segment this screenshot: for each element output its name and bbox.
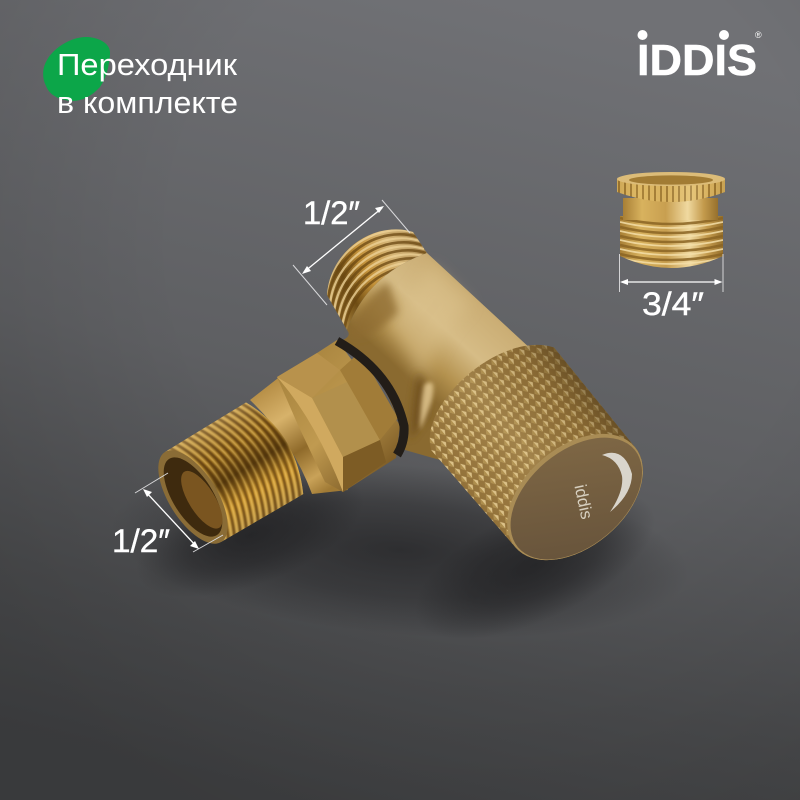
adapter thread	[620, 216, 723, 268]
adapter neck	[623, 198, 718, 220]
adapter collar	[617, 172, 725, 202]
hex nut and collar	[277, 340, 400, 492]
heading: в комплекте	[57, 85, 238, 120]
rubber sealing ring	[337, 341, 404, 455]
green accent blob	[43, 37, 110, 101]
brand logo: ®	[755, 30, 762, 40]
cap swoosh mark	[602, 453, 632, 512]
knob cap	[483, 409, 667, 585]
cast shadow	[104, 440, 696, 670]
knurled knob	[409, 321, 668, 587]
heading: Переходник	[57, 47, 237, 82]
body highlight and shading	[350, 265, 470, 440]
hex lower face	[343, 440, 386, 492]
valve body	[343, 253, 532, 460]
lower threaded pipe	[158, 402, 304, 544]
cap logo: iddis	[570, 483, 596, 521]
dimension: lower 1/2 inch: 1/2″	[112, 523, 170, 559]
dimension: upper 1/2 inch: 1/2″	[303, 195, 360, 231]
adapter fitting	[617, 172, 725, 268]
pipe neck	[250, 375, 348, 494]
brand logo: IDDIS	[637, 36, 757, 85]
dimension: lower 1/2 inch	[112, 473, 223, 559]
collar highlight	[340, 352, 398, 440]
heading	[57, 47, 238, 120]
dimension: upper 1/2 inch	[293, 195, 410, 305]
hex top face	[277, 353, 340, 398]
upper threaded stub	[326, 229, 434, 332]
hex center face	[312, 382, 380, 457]
pipe end rim and opening	[145, 439, 241, 555]
dimension: 3/4 inch	[620, 254, 723, 322]
knob side	[409, 321, 668, 587]
dimension: 3/4 inch: 3/4″	[642, 286, 704, 322]
